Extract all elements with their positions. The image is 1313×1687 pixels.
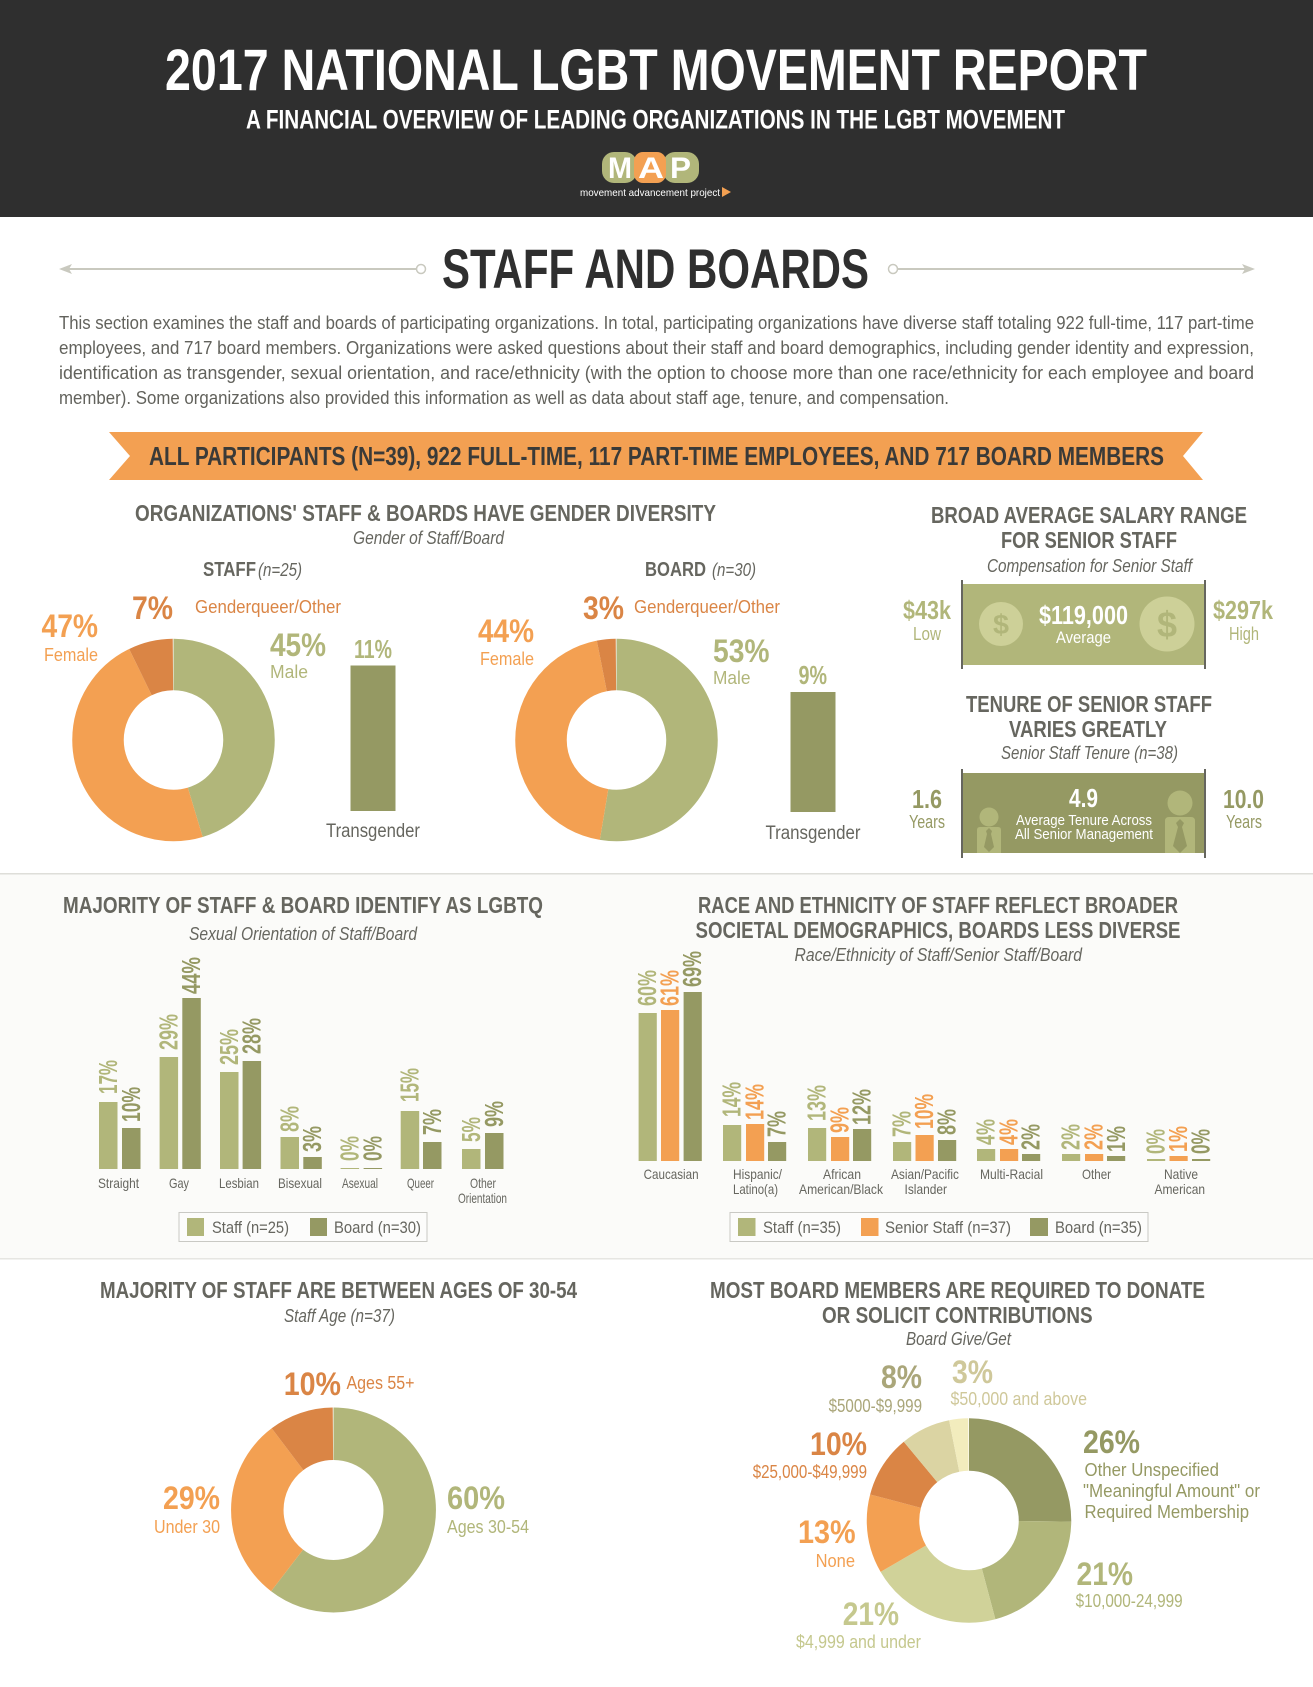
label: none — [798, 1514, 856, 1571]
category labels: Islander — [904, 1181, 947, 1197]
category labels: Other — [470, 1175, 496, 1191]
staff value labels: 15% — [394, 1068, 424, 1102]
ribbon banner: all participants — [109, 432, 1203, 480]
subheading: tenure: Senior Staff Tenure (n=38) — [1001, 743, 1178, 763]
high tenure: Years — [1226, 812, 1262, 832]
board bars — [122, 998, 504, 1169]
label: under 30: Under 30 — [154, 1517, 220, 1537]
heading: salary range — [931, 502, 1247, 553]
label: female 47%: Female — [44, 645, 98, 665]
label: male 45%: 45% — [270, 627, 326, 663]
board value labels: 44% — [176, 957, 206, 994]
heading: race and ethnicity: SOCIETAL DEMOGRAPHICS, BOARDS LESS DIVERSE — [696, 917, 1180, 943]
low salary: Low — [913, 624, 942, 644]
label: $50,000 and above — [950, 1354, 1087, 1409]
staff value labels: 8% — [274, 1106, 304, 1132]
label: male 45% — [270, 627, 326, 682]
label: male 53%: 53% — [713, 633, 770, 669]
category labels: Orientation — [458, 1190, 507, 1206]
board value labels — [677, 951, 1216, 1154]
board chart heading: (n=30) — [712, 560, 756, 580]
bar: staff transgender — [326, 634, 421, 842]
icon: small coin: $ — [993, 609, 1009, 640]
high tenure: 10.0 — [1223, 784, 1264, 814]
board value labels: 2% — [1016, 1124, 1046, 1150]
panel: gender diversity — [42, 500, 861, 844]
panel: staff age — [100, 1277, 577, 1586]
label: $25,000-$49,999: $25,000-$49,999 — [753, 1462, 867, 1482]
board value labels: 0% — [1186, 1129, 1216, 1154]
staff value labels: 60% — [632, 970, 662, 1006]
label: ages 55+: 10% — [284, 1366, 341, 1402]
label: $4,999 and under — [796, 1596, 921, 1652]
category labels: Straight — [98, 1175, 139, 1191]
staff value labels: 17% — [93, 1060, 123, 1094]
label: $25,000-$49,999: 10% — [810, 1426, 867, 1462]
category labels: African — [823, 1166, 861, 1182]
heading: give/get: OR SOLICIT CONTRIBUTIONS — [822, 1302, 1093, 1328]
heading: tenure: TENURE OF SENIOR STAFF — [966, 691, 1212, 717]
low tenure: Years — [909, 812, 945, 832]
senior staff bars — [661, 1010, 1188, 1161]
category labels: Asian/Pacific — [891, 1166, 959, 1182]
label: none: 13% — [798, 1514, 856, 1550]
low salary: $43k — [903, 595, 951, 625]
label: $4,999 and under: 21% — [843, 1596, 899, 1632]
logo: MAP: M — [608, 152, 632, 185]
board chart heading: BOARD — [645, 559, 706, 581]
legend: race: Staff (n=35) — [763, 1218, 841, 1237]
label: male 45%: Male — [270, 662, 308, 682]
icon: small person — [977, 808, 1001, 853]
staff value labels: 14% — [716, 1082, 746, 1117]
senior staff value labels: 14% — [740, 1084, 770, 1120]
label: $5000-$9,999 — [829, 1359, 922, 1416]
category labels: American/Black — [799, 1181, 884, 1197]
board chart heading — [645, 559, 756, 581]
label: genderqueer 3%: 3% — [583, 590, 624, 626]
category labels — [644, 1166, 1205, 1197]
staff value labels: 5% — [456, 1117, 486, 1142]
staff chart heading: STAFF — [203, 559, 256, 581]
board value labels: 7% — [762, 1111, 792, 1137]
label: male 53% — [713, 633, 770, 688]
category labels: Other — [1082, 1166, 1111, 1182]
average tenure: Average Tenure Across — [1016, 812, 1152, 829]
board value labels — [116, 957, 509, 1161]
heading: salary range: FOR SENIOR STAFF — [1001, 527, 1177, 553]
average tenure: All Senior Management — [1015, 826, 1154, 843]
staff chart heading: (n=25) — [258, 560, 302, 580]
label: ages 30-54: Ages 30-54 — [447, 1517, 529, 1537]
logo: MAP: P — [670, 152, 691, 185]
label: genderqueer 7% — [132, 590, 341, 626]
staff value labels: 0% — [334, 1136, 364, 1161]
category labels: Latino(a) — [733, 1181, 778, 1197]
label: other unspecified: 26% — [1083, 1424, 1140, 1460]
category labels — [98, 1175, 507, 1206]
legend: race: Board (n=35) — [1055, 1218, 1142, 1237]
section heading: staff and boards: STAFF AND BOARDS — [442, 237, 869, 300]
intro paragraph — [59, 312, 1254, 408]
bar: board transgender — [766, 660, 861, 844]
board bars — [684, 992, 1210, 1161]
label: male 53%: Male — [713, 668, 750, 688]
high salary: $297k — [1213, 595, 1273, 625]
header banner — [0, 0, 1313, 217]
salary box — [961, 580, 1206, 669]
staff value labels: 7% — [886, 1111, 916, 1137]
heading: LGBTQ: MAJORITY OF STAFF & BOARD IDENTIFY AS LGBTQ — [63, 892, 543, 918]
low tenure: 1.6 — [912, 784, 942, 814]
label: female 44%: Female — [480, 649, 534, 669]
board value labels: 9% — [479, 1101, 509, 1127]
staff chart heading — [203, 559, 302, 581]
board value labels: 8% — [932, 1109, 962, 1135]
subheading: gender: Gender of Staff/Board — [353, 528, 505, 548]
label: genderqueer 3% — [583, 590, 780, 626]
high salary: High — [1229, 624, 1259, 644]
label: ages 55+ — [284, 1366, 414, 1402]
label: ages 55+: Ages 55+ — [346, 1373, 414, 1393]
label: $25,000-$49,999 — [753, 1426, 867, 1482]
senior staff value labels: 9% — [824, 1107, 854, 1133]
category labels: Queer — [407, 1175, 434, 1191]
label: ages 30-54 — [447, 1480, 529, 1537]
panel: sexual orientation — [63, 892, 543, 1242]
icon: large coin — [1140, 596, 1194, 652]
senior staff value labels — [654, 970, 1193, 1152]
staff value labels — [93, 1014, 486, 1161]
legend: orientation: Staff (n=25) — [212, 1218, 289, 1237]
legend: orientation: Board (n=30) — [334, 1218, 421, 1237]
label: $50,000 and above: $50,000 and above — [950, 1389, 1087, 1409]
panel: board give/get — [710, 1277, 1260, 1652]
bar: staff transgender: 11% — [354, 634, 392, 664]
legend: orientation — [179, 1212, 427, 1242]
label: $10,000-24,999: $10,000-24,999 — [1076, 1591, 1183, 1611]
heading: tenure — [966, 691, 1212, 742]
board value labels: 7% — [417, 1109, 447, 1135]
senior staff value labels: 61% — [654, 970, 684, 1006]
average salary: $119,000 — [1039, 600, 1128, 630]
staff value labels: 29% — [154, 1014, 184, 1050]
board value labels: 3% — [297, 1126, 327, 1152]
staff value labels: 2% — [1056, 1124, 1086, 1150]
category labels: Lesbian — [219, 1175, 259, 1191]
high salary — [1213, 595, 1273, 644]
label: female 47% — [42, 608, 98, 665]
icon: small coin — [979, 602, 1023, 646]
subheading: orientation: Sexual Orientation of Staff/Board — [189, 924, 418, 944]
subtitle: A FINANCIAL OVERVIEW OF LEADING ORGANIZATIONS IN THE LGBT MOVEMENT — [246, 104, 1065, 134]
intro paragraph: member). Some organizations also provided this information as well as data about staff age, tenure, and compensation. — [59, 387, 949, 408]
senior staff value labels: 2% — [1078, 1124, 1108, 1150]
panel: senior staff tenure — [909, 691, 1264, 858]
label: other unspecified: Other Unspecified — [1084, 1460, 1219, 1480]
heading: race and ethnicity: RACE AND ETHNICITY OF STAFF REFLECT BROADER — [698, 892, 1178, 918]
heading: give/get: MOST BOARD MEMBERS ARE REQUIRED TO DONATE — [710, 1277, 1205, 1303]
staff value labels: 4% — [970, 1119, 1000, 1145]
category labels: American — [1154, 1181, 1205, 1197]
bar: board transgender: Transgender — [766, 823, 861, 844]
category labels: Caucasian — [644, 1166, 699, 1182]
heading: gender diversity: ORGANIZATIONS' STAFF & BOARDS HAVE GENDER DIVERSITY — [135, 500, 716, 526]
category labels: Native — [1164, 1166, 1198, 1182]
section heading: staff and boards — [59, 237, 1255, 300]
label: ages 30-54: 60% — [447, 1480, 505, 1516]
panel: race and ethnicity — [632, 892, 1216, 1242]
category labels: Bisexual — [278, 1175, 322, 1191]
logo: MAP: movement advancement project — [580, 187, 720, 199]
board value labels: 1% — [1101, 1126, 1131, 1152]
board value labels: 0% — [358, 1136, 388, 1161]
background band: middle section — [0, 873, 1313, 1259]
staff bars — [639, 1013, 1165, 1161]
staff bars — [99, 1057, 480, 1169]
board value labels: 10% — [116, 1087, 146, 1122]
subheading: age: Staff Age (n=37) — [284, 1306, 395, 1326]
label: $50,000 and above: 3% — [952, 1354, 993, 1390]
label: under 30: 29% — [163, 1480, 220, 1516]
donut chart: board give/get — [893, 1444, 1045, 1596]
average tenure: 4.9 — [1069, 783, 1098, 813]
staff value labels: 0% — [1140, 1129, 1170, 1154]
legend: race: Senior Staff (n=37) — [885, 1218, 1011, 1237]
label: female 44% — [478, 613, 534, 669]
heading: race and ethnicity — [696, 892, 1180, 943]
intro paragraph: identification as transgender, sexual orientation, and race/ethnicity (with the option to choose more than one race/ethnicity for each employee and board — [59, 362, 1254, 383]
label: female 47%: 47% — [42, 608, 98, 644]
label: other unspecified — [1083, 1424, 1260, 1522]
bar: board transgender: 9% — [798, 660, 827, 690]
donut chart: board gender — [541, 664, 692, 816]
staff value labels: 13% — [802, 1085, 832, 1121]
senior staff value labels: 4% — [994, 1119, 1024, 1145]
average salary — [1039, 600, 1128, 647]
label: $10,000-24,999: 21% — [1076, 1556, 1133, 1592]
label: $4,999 and under: $4,999 and under — [796, 1632, 921, 1652]
label: other unspecified: Required Membership — [1084, 1502, 1249, 1522]
label: under 30 — [154, 1480, 220, 1537]
label: $10,000-24,999 — [1076, 1556, 1183, 1611]
heading: give/get — [710, 1277, 1205, 1328]
category labels: Multi-Racial — [980, 1166, 1043, 1182]
bar chart: race and ethnicity — [632, 951, 1216, 1197]
bar chart: sexual orientation — [93, 957, 509, 1206]
label: genderqueer 3%: Genderqueer/Other — [634, 597, 780, 617]
heading: staff age: MAJORITY OF STAFF ARE BETWEEN AGES OF 30-54 — [100, 1277, 577, 1303]
tenure box — [961, 769, 1206, 858]
category labels: Asexual — [342, 1175, 378, 1191]
donut chart: staff gender — [98, 664, 249, 816]
logo: MAP — [580, 152, 731, 199]
label: genderqueer 7%: Genderqueer/Other — [195, 597, 341, 617]
average salary: Average — [1056, 628, 1111, 647]
bar: staff transgender: Transgender — [326, 821, 421, 842]
logo: MAP: A — [638, 152, 664, 185]
subheading: race: Race/Ethnicity of Staff/Senior Staff/Board — [794, 945, 1083, 965]
category labels: Hispanic/ — [733, 1166, 782, 1182]
label: other unspecified: "Meaningful Amount" or — [1083, 1481, 1260, 1501]
label: female 44%: 44% — [478, 613, 534, 649]
low tenure — [909, 784, 945, 832]
average tenure — [1015, 783, 1154, 843]
donut chart: staff age — [257, 1434, 410, 1586]
staff value labels: 25% — [214, 1029, 244, 1065]
staff value labels — [632, 970, 1170, 1154]
label: genderqueer 7%: 7% — [132, 590, 173, 626]
label: $5000-$9,999: 8% — [881, 1359, 922, 1395]
board value labels: 28% — [236, 1018, 266, 1054]
panel: senior staff salary — [903, 502, 1273, 669]
icon: large coin: $ — [1157, 604, 1177, 645]
label: none: None — [816, 1551, 855, 1571]
subheading: give/get: Board Give/Get — [906, 1329, 1012, 1349]
senior staff value labels: 10% — [909, 1094, 939, 1129]
board value labels: 69% — [677, 951, 707, 987]
senior staff value labels: 1% — [1163, 1126, 1193, 1152]
high tenure — [1223, 784, 1264, 832]
low salary — [903, 595, 951, 644]
legend: race — [730, 1212, 1148, 1242]
icon: large person — [1165, 790, 1195, 853]
subheading: compensation: Compensation for Senior Staff — [987, 556, 1194, 576]
category labels: Gay — [169, 1175, 189, 1191]
label: $5000-$9,999: $5000-$9,999 — [829, 1396, 922, 1416]
heading: tenure: VARIES GREATLY — [1009, 716, 1167, 742]
board value labels: 12% — [846, 1089, 876, 1125]
